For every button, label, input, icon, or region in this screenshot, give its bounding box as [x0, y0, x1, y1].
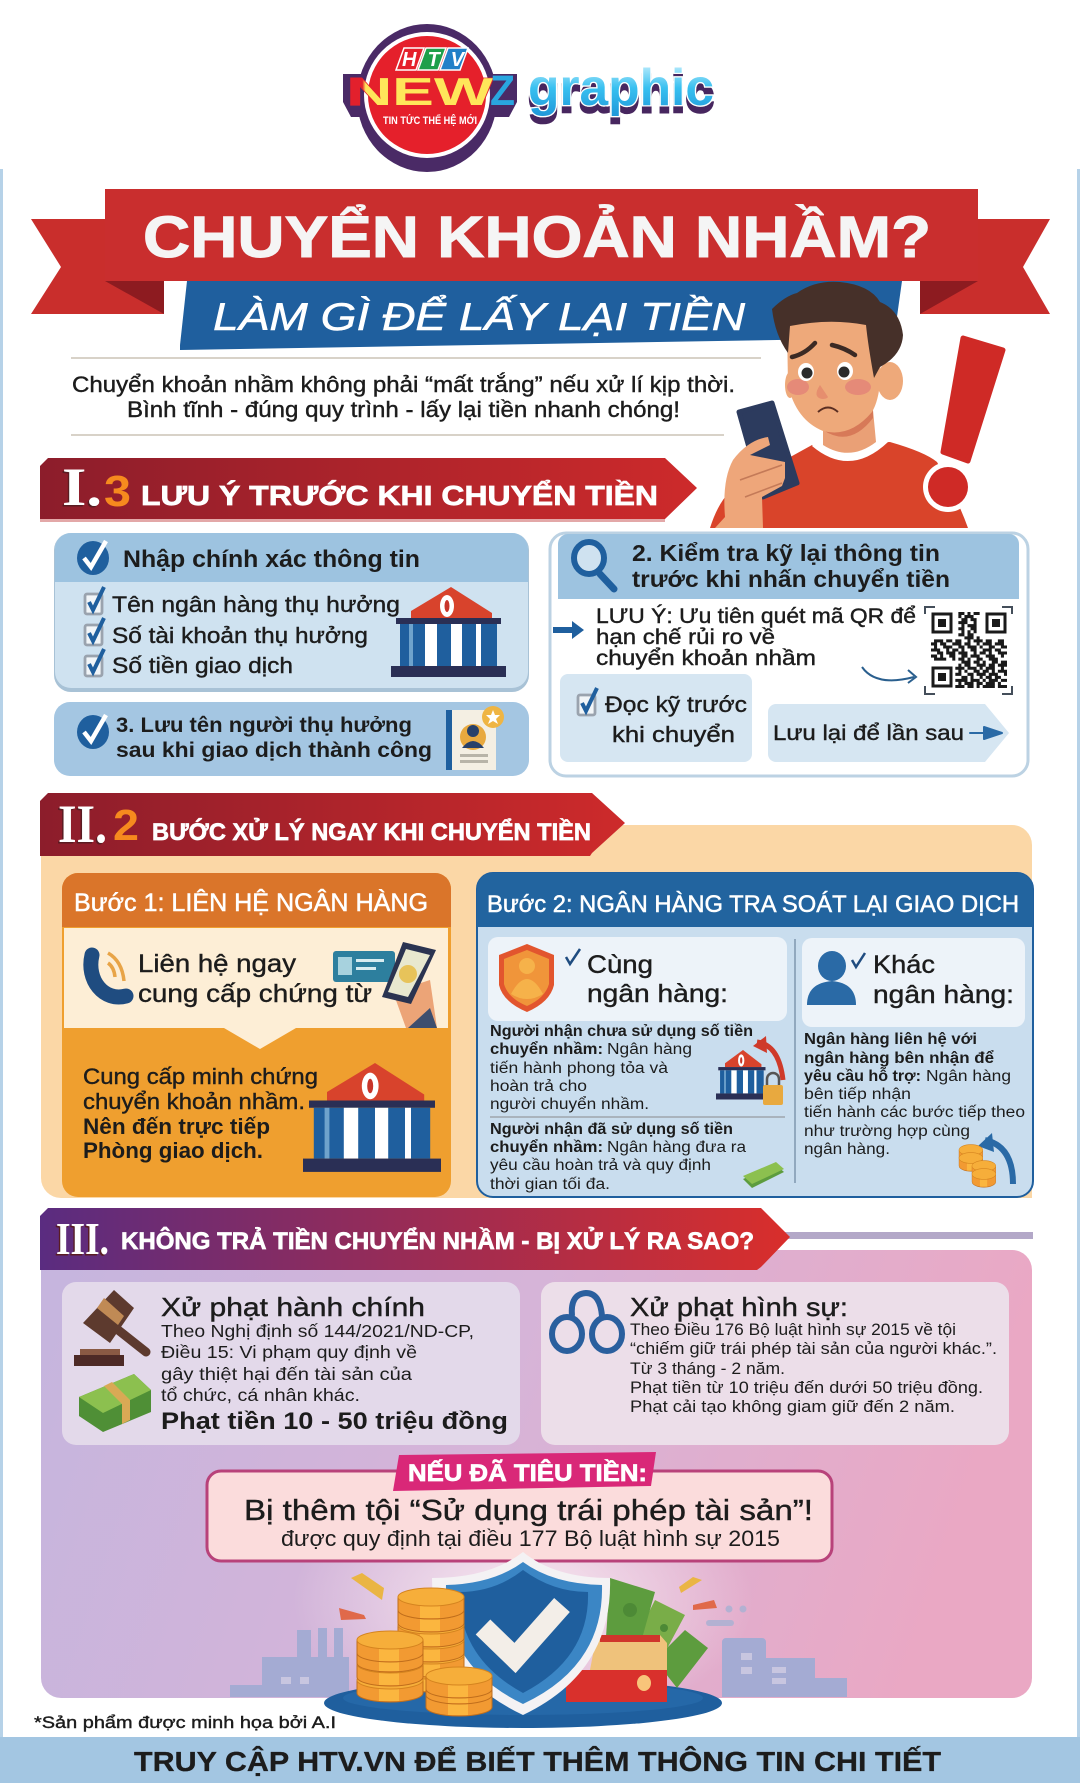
evidence text: Phòng giao dịch. — [83, 1138, 263, 1163]
icon: shield person — [499, 944, 554, 1012]
credit note: *Sản phẩm được minh họa bởi A.I — [34, 1713, 336, 1732]
step 1 header: Bước 1: LIÊN HỆ NGÂN HÀNG — [74, 888, 428, 917]
illustration: worried man with phone and exclamation mark — [710, 282, 1003, 528]
panel heading: Nhập chính xác thông tin — [123, 546, 420, 573]
intro text: Bình tĩnh - đúng quy trình - lấy lại tiền nhanh chóng! — [127, 397, 680, 422]
panel text: sau khi giao dịch thành công — [116, 739, 432, 762]
same bank: funds used: chuyển nhầm: — [490, 1139, 603, 1156]
heading: Xử phạt hành chính — [161, 1292, 425, 1322]
icon: cash — [79, 1374, 151, 1432]
sub-panel heading — [873, 951, 1014, 1009]
callout text: Bị thêm tội “Sử dụng trái phép tài sản”! — [244, 1495, 813, 1527]
intro text: Chuyển khoản nhầm không phải “mất trắng” nếu xử lí kịp thời. — [72, 372, 735, 397]
icon: gavel — [74, 1290, 146, 1366]
logo: HTV NewZ graphic — [343, 24, 714, 172]
NewZ wordmark: NEW — [347, 71, 493, 114]
panel: step 1 contact bank — [62, 873, 451, 1197]
cheeks — [787, 379, 871, 395]
other bank text: yêu cầu hỗ trợ: — [804, 1068, 921, 1085]
section II banner: 2 — [113, 801, 139, 850]
same bank: funds unused: chuyển nhầm: — [490, 1041, 603, 1058]
arrow — [970, 727, 1002, 739]
body text: Từ 3 tháng - 2 năm. — [630, 1360, 785, 1378]
section I banner — [40, 457, 697, 522]
same bank: funds used — [490, 1121, 746, 1193]
hand — [715, 437, 785, 528]
section I banner: I. — [62, 457, 102, 517]
body text: Phạt cải tạo không giam giữ đến 2 năm. — [630, 1398, 955, 1416]
icon: contact document — [446, 706, 504, 770]
checklist: Tên ngân hàng thụ hưởng — [112, 592, 400, 617]
sweater — [710, 442, 968, 528]
section II banner: II. — [58, 794, 107, 854]
callout: if the money was spent — [207, 1452, 832, 1561]
other bank text: bên tiếp nhận — [804, 1086, 911, 1103]
checklist: Số tiền giao dịch — [112, 653, 293, 678]
other bank text — [804, 1031, 1025, 1158]
intro text — [71, 358, 761, 435]
icon: magnifier — [574, 542, 614, 589]
cash fan — [606, 1578, 708, 1688]
sub-panel heading: ngân hàng: — [587, 980, 728, 1008]
check mark — [483, 1605, 562, 1658]
same bank: funds unused — [490, 1023, 753, 1113]
icon: bank with lock — [716, 1036, 783, 1105]
fine amount: Phạt tiền 10 - 50 triệu đồng — [161, 1408, 508, 1435]
contact text: cung cấp chứng từ — [138, 980, 372, 1008]
sub-panel heading — [587, 951, 728, 1008]
QR note — [596, 605, 916, 670]
evidence text: Cung cấp minh chứng — [83, 1064, 318, 1089]
box: read carefully — [560, 674, 752, 762]
checklist — [85, 587, 400, 678]
other bank text: ngân hàng bên nhận để — [804, 1050, 994, 1067]
check mark — [566, 949, 580, 964]
body text: gây thiệt hại đến tài sản của — [161, 1364, 412, 1384]
check icon — [77, 541, 109, 575]
panel text: 3. Lưu tên người thụ hưởng — [116, 714, 412, 737]
city silhouette — [230, 1628, 847, 1697]
panel: criminal penalty — [541, 1282, 1009, 1445]
exclamation mark — [943, 338, 1003, 461]
step 2 header — [477, 873, 1033, 927]
footer bar — [0, 1737, 1080, 1783]
evidence text: Nên đến trực tiếp — [83, 1114, 270, 1139]
section III banner — [40, 1208, 790, 1270]
icon: telephone — [91, 953, 126, 997]
panel: step 2 bank review — [477, 873, 1033, 1197]
icon: cash — [743, 1162, 784, 1188]
section II banner: BƯỚC XỬ LÝ NGAY KHI CHUYỂN TIỀN — [152, 817, 591, 846]
QR note: LƯU Ý: Ưu tiên quét mã QR để — [596, 605, 916, 628]
other bank text: ngân hàng. — [804, 1141, 890, 1158]
sub-panel heading: Khác — [873, 951, 935, 979]
sub-panel: other bank — [802, 938, 1025, 1027]
panel heading — [632, 540, 950, 592]
panel: administrative penalty — [62, 1282, 520, 1445]
checklist: Số tài khoản thụ hưởng — [112, 623, 368, 648]
face — [787, 314, 880, 432]
other bank text: Ngân hàng — [926, 1068, 1011, 1085]
same bank: funds used: yêu cầu hoàn trả và quy định — [490, 1157, 711, 1174]
evidence text: chuyển khoản nhầm. — [83, 1089, 305, 1114]
subtitle: LÀM GÌ ĐỂ LẤY LẠI TIỀN — [213, 294, 746, 339]
title ribbon — [31, 189, 1050, 350]
column divider — [794, 939, 796, 1183]
step 2 header: Bước 2: NGÂN HÀNG TRA SOÁT LẠI GIAO DỊCH — [487, 891, 1019, 918]
cream callout — [64, 928, 448, 1049]
sparks — [339, 1573, 746, 1626]
icon: bank — [391, 587, 506, 677]
body text — [630, 1321, 997, 1416]
section II banner — [40, 793, 625, 856]
step 1 header — [62, 873, 451, 927]
panel: section III background — [41, 1250, 1032, 1730]
other bank text: tiến hành các bước tiếp theo — [804, 1104, 1025, 1121]
icon: card and phone in hand — [333, 942, 437, 1028]
check icon — [77, 715, 109, 749]
section I banner: 3 — [104, 467, 131, 516]
section III banner: III. — [56, 1213, 109, 1264]
NewZ wordmark: Z — [490, 67, 515, 115]
panel: verify information — [550, 533, 1028, 776]
body text — [161, 1321, 474, 1405]
same bank: funds used: Ngân hàng đưa ra — [607, 1139, 746, 1156]
sub-panel heading: Cùng — [587, 951, 653, 979]
panel heading: trước khi nhấn chuyển tiền — [632, 566, 950, 592]
main title: CHUYỂN KHOẢN NHẦM? — [143, 205, 931, 270]
box: save for next time: Lưu lại để lần sau — [773, 722, 964, 745]
body text: “chiếm giữ trái phép tài sản của người khác.”. — [630, 1340, 997, 1358]
sub-panel heading: ngân hàng: — [873, 981, 1014, 1009]
logo tagline: TIN TỨC THẾ HỆ MỚI — [383, 114, 477, 127]
section III banner: KHÔNG TRẢ TIỀN CHUYỂN NHẦM - BỊ XỬ LÝ RA SAO? — [121, 1226, 754, 1255]
neck and collar — [812, 410, 888, 461]
panel: enter correct information — [54, 533, 529, 692]
footer bar: TRUY CẬP HTV.VN ĐỂ BIẾT THÊM THÔNG TIN CHI TIẾT — [134, 1745, 941, 1777]
illustration: shield, coins, wallet — [230, 1552, 847, 1728]
callout: if the money was spent: được quy định tại điều 177 Bộ luật hình sự 2015 — [281, 1526, 780, 1551]
box: read carefully: Đọc kỹ trước — [605, 692, 747, 717]
same bank: funds used: Người nhận đã sử dụng số tiền — [490, 1121, 733, 1138]
panel: section II background — [41, 825, 1032, 1198]
body text: Điều 15: Vi phạm quy định về — [161, 1342, 417, 1362]
same bank: funds unused: Người nhận chưa sử dụng số tiền — [490, 1023, 753, 1040]
ribbon tails — [31, 219, 1050, 314]
panel heading: 2. Kiểm tra kỹ lại thông tin — [632, 540, 940, 566]
NewZ wordmark — [347, 67, 515, 115]
shield — [432, 1552, 610, 1715]
box: read carefully: khi chuyển — [612, 722, 735, 747]
QR note: hạn chế rủi ro về — [596, 626, 775, 649]
heading: Xử phạt hình sự: — [630, 1292, 848, 1322]
box: save for next time — [768, 704, 1009, 762]
ears — [785, 362, 903, 400]
eyes and brows — [792, 343, 855, 412]
same bank: funds unused: hoàn trả cho — [490, 1078, 587, 1095]
curved arrow — [862, 667, 916, 683]
panel text — [116, 714, 432, 762]
body text: Theo Nghị định số 144/2021/ND-CP, — [161, 1321, 474, 1341]
evidence text — [83, 1064, 318, 1163]
other bank text: như trường hợp cùng — [804, 1123, 970, 1140]
panel: save recipient name — [54, 702, 529, 776]
body text: tổ chức, cá nhân khác. — [161, 1385, 360, 1405]
sub-panel: same bank — [488, 937, 787, 1021]
contact text — [138, 950, 372, 1008]
check mark — [852, 953, 865, 967]
phone — [739, 403, 797, 497]
body text: Theo Điều 176 Bộ luật hình sự 2015 về tội — [630, 1321, 956, 1339]
same bank: funds unused: tiến hành phong tỏa và — [490, 1060, 668, 1077]
QR note: chuyển khoản nhầm — [596, 647, 816, 670]
front coin stacks — [357, 1631, 492, 1716]
pink tag — [393, 1452, 656, 1491]
section I banner: LƯU Ý TRƯỚC KHI CHUYỂN TIỀN — [141, 480, 658, 511]
other bank text: Ngân hàng liên hệ với — [804, 1031, 977, 1048]
same bank: funds used: thời gian tối đa. — [490, 1176, 610, 1193]
icon: coins with return arrow — [959, 1133, 1013, 1187]
arrow — [553, 621, 584, 639]
blue subtitle banner — [180, 281, 902, 350]
icon: QR code — [925, 607, 1012, 694]
same bank: funds unused: người chuyển nhầm. — [490, 1096, 649, 1113]
wallet — [566, 1635, 667, 1702]
grey rule beside section III banner — [785, 1232, 1033, 1239]
body text: Phạt tiền từ 10 triệu đến dưới 50 triệu đồng. — [630, 1379, 983, 1397]
contact text: Liên hệ ngay — [138, 950, 297, 978]
hair — [772, 282, 903, 378]
tall coin stack — [398, 1588, 464, 1692]
exclamation dot — [923, 462, 973, 512]
pink tag: NẾU ĐÃ TIÊU TIỀN: — [408, 1459, 647, 1487]
HTV mark: HTV — [402, 49, 466, 71]
icon: handcuffs — [552, 1293, 622, 1351]
same bank: funds unused: Ngân hàng — [607, 1041, 692, 1058]
icon: bank — [303, 1063, 441, 1172]
graphic wordmark: graphic — [528, 59, 714, 117]
icon: person — [807, 951, 856, 1005]
base ellipse — [324, 1678, 722, 1728]
red main banner — [105, 189, 978, 281]
